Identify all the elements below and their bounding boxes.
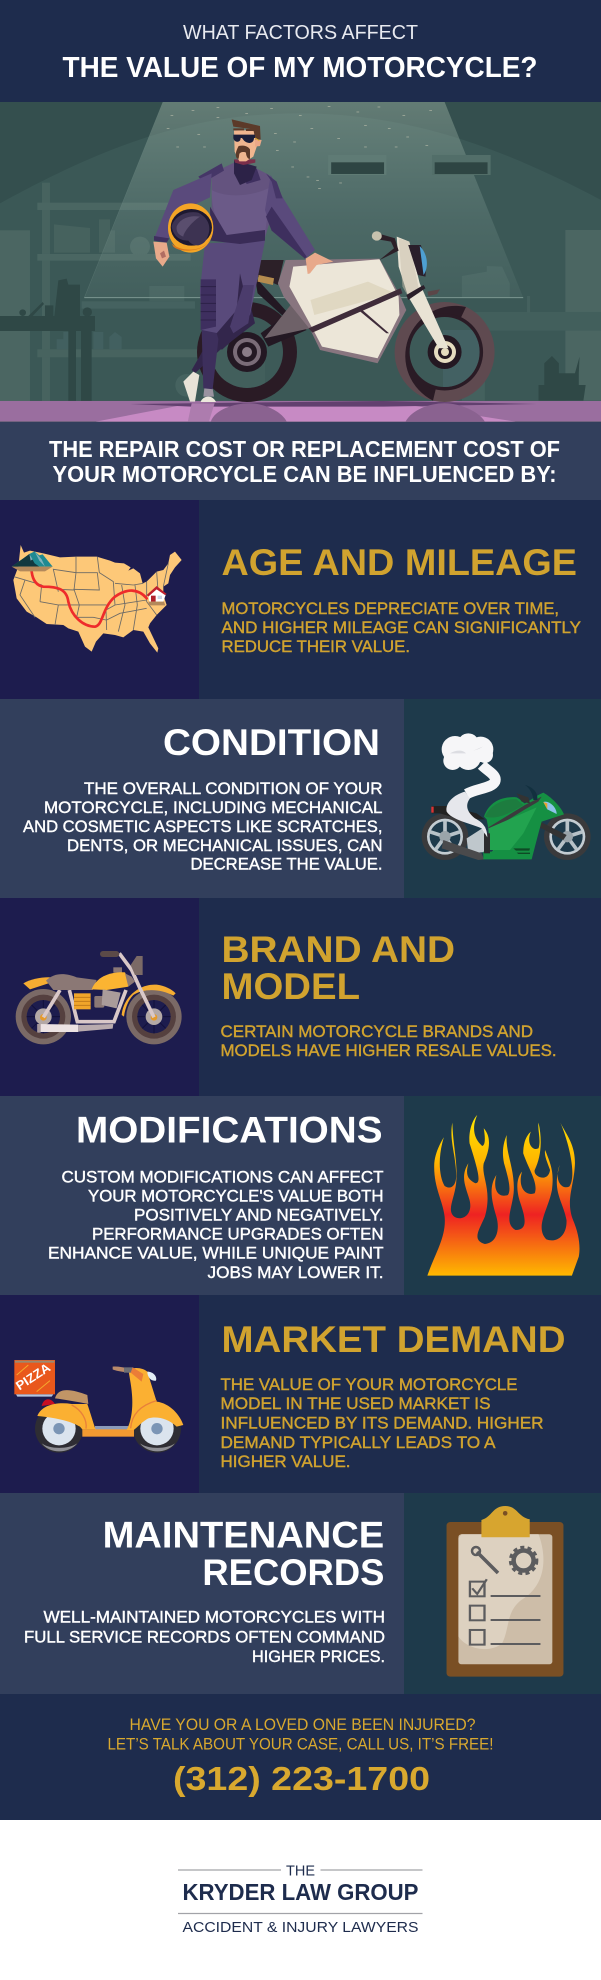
rider with helmet: [153, 119, 333, 402]
hero illustration: rider and motorcycle in garage: [0, 102, 601, 422]
body text: CERTAIN MOTORCYCLE BRANDS AND: [220, 1022, 533, 1041]
body text: MOTORCYCLES DEPRECIATE OVER TIME,: [222, 599, 559, 618]
heading: MAINTENANCE: [103, 1514, 384, 1556]
panel: condition: [0, 699, 601, 898]
icon: pizza delivery scooter: PIZZA: [13, 1361, 53, 1393]
footer call to action: [0, 1694, 601, 1820]
body text: [222, 599, 581, 656]
body text: THE OVERALL CONDITION OF YOUR: [84, 779, 382, 798]
body text: MODELS HAVE HIGHER RESALE VALUES.: [220, 1041, 556, 1060]
heading: MODIFICATIONS: [76, 1110, 382, 1150]
panel: modifications: [0, 1096, 601, 1295]
heading: [103, 1514, 384, 1593]
body text: INFLUENCED BY ITS DEMAND. HIGHER: [220, 1414, 544, 1432]
icon: clipboard checklist: [447, 1506, 563, 1677]
body text: DEMAND TYPICALLY LEADS TO A: [220, 1433, 496, 1452]
panel: brand and model: [0, 898, 601, 1096]
call to action text: HAVE YOU OR A LOVED ONE BEEN INJURED?: [130, 1716, 476, 1734]
heading: BRAND AND: [222, 929, 455, 970]
body text: [220, 1375, 544, 1471]
header panel: [0, 0, 601, 102]
icon: USA map with route: [12, 545, 182, 653]
header line 1: WHAT FACTORS AFFECT: [183, 21, 418, 44]
body text: YOUR MOTORCYCLE'S VALUE BOTH: [88, 1186, 384, 1206]
heading: MODEL: [222, 966, 360, 1007]
subheader panel: [0, 422, 601, 500]
body text: DECREASE THE VALUE.: [190, 854, 382, 874]
body text: [23, 779, 382, 874]
body text: CUSTOM MODIFICATIONS CAN AFFECT: [62, 1168, 384, 1186]
body text: POSITIVELY AND NEGATIVELY.: [134, 1206, 384, 1224]
icon: pizza delivery scooter: [13, 1360, 183, 1453]
subheader text: THE REPAIR COST OR REPLACEMENT COST OF: [49, 436, 560, 462]
phone number: (312) 223-1700: [173, 1760, 430, 1797]
icon: orange motorcycle: [16, 951, 182, 1044]
body text: HIGHER PRICES.: [252, 1647, 385, 1666]
floor: [0, 401, 601, 422]
body text: [24, 1608, 385, 1666]
panel: age and mileage: [0, 500, 601, 699]
heading: MARKET DEMAND: [222, 1319, 566, 1360]
logo: The Kryder Law Group: ACCIDENT & INJURY LAWYERS: [182, 1920, 418, 1936]
main title: THE VALUE OF MY MOTORCYCLE?: [62, 52, 538, 84]
call to action text: LET’S TALK ABOUT YOUR CASE, CALL US, IT’S FREE!: [108, 1736, 494, 1754]
logo: The Kryder Law Group: [0, 1820, 601, 1980]
body text: REDUCE THEIR VALUE.: [222, 637, 410, 656]
panel: maintenance records: [0, 1493, 601, 1694]
panel: market demand: [0, 1295, 601, 1493]
logo: The Kryder Law Group: KRYDER LAW GROUP: [182, 1879, 418, 1905]
body text: MOTORCYCLE, INCLUDING MECHANICAL: [44, 798, 382, 817]
body text: WELL-MAINTAINED MOTORCYCLES WITH: [44, 1608, 385, 1626]
body text: [220, 1022, 556, 1060]
motorcycle: [197, 231, 495, 402]
call to action text: [108, 1716, 494, 1754]
heading: [222, 929, 455, 1007]
body text: [48, 1168, 384, 1282]
body text: AND COSMETIC ASPECTS LIKE SCRATCHES,: [23, 817, 382, 836]
logo: The Kryder Law Group: THE: [286, 1864, 315, 1880]
body text: THE VALUE OF YOUR MOTORCYCLE: [220, 1375, 518, 1394]
subheader text: [49, 436, 560, 487]
heading: RECORDS: [202, 1552, 384, 1593]
body text: FULL SERVICE RECORDS OFTEN COMMAND: [24, 1628, 385, 1646]
body text: JOBS MAY LOWER IT.: [208, 1263, 384, 1282]
body text: DENTS, OR MECHANICAL ISSUES, CAN: [67, 836, 382, 855]
heading: AGE AND MILEAGE: [222, 542, 577, 583]
body text: AND HIGHER MILEAGE CAN SIGNIFICANTLY: [222, 618, 581, 637]
body text: ENHANCE VALUE, WHILE UNIQUE PAINT: [48, 1244, 384, 1262]
heading: CONDITION: [163, 722, 380, 763]
subheader text: YOUR MOTORCYCLE CAN BE INFLUENCED BY:: [52, 461, 556, 487]
body text: PERFORMANCE UPGRADES OFTEN: [92, 1224, 383, 1244]
icon: flames: [427, 1115, 580, 1276]
body text: MODEL IN THE USED MARKET IS: [220, 1394, 490, 1413]
body text: HIGHER VALUE.: [220, 1452, 350, 1471]
icon: smoking green motorcycle: [422, 733, 591, 860]
